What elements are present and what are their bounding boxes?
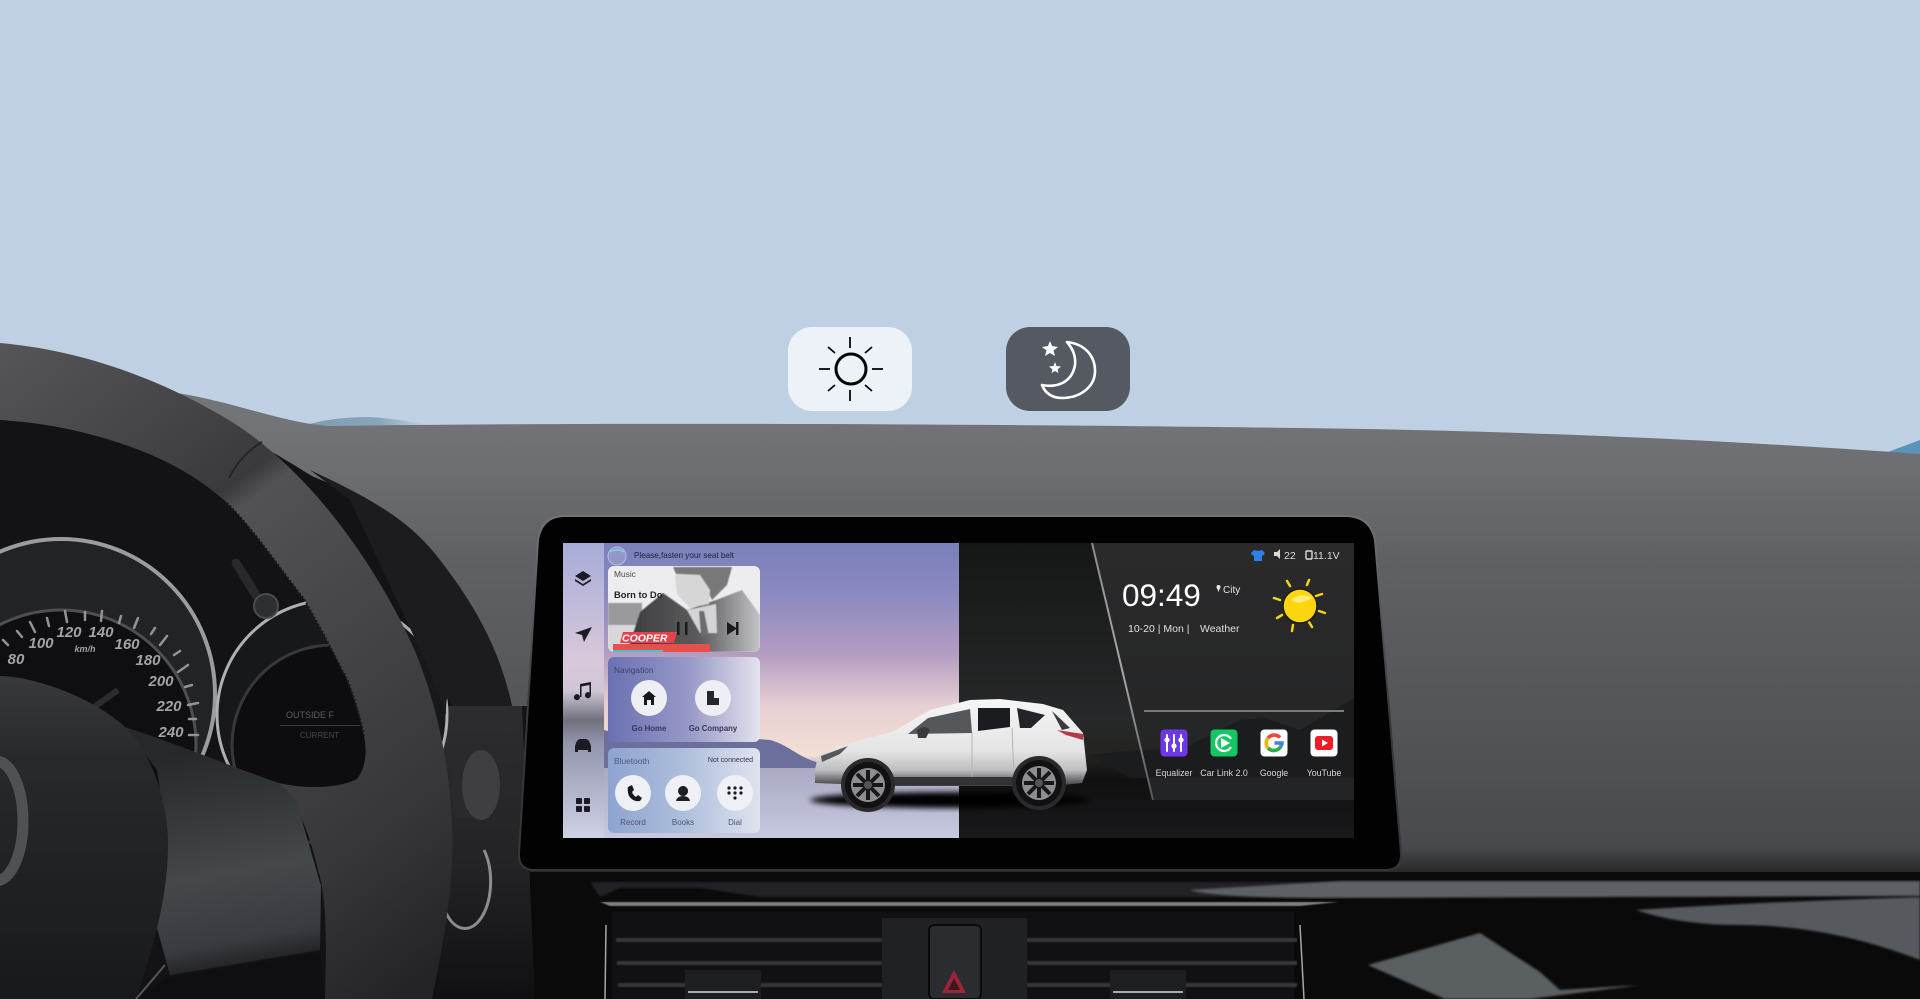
car illustration [810, 699, 1090, 812]
navigation card: Go Company [689, 724, 738, 733]
gloss reflections [1636, 897, 1920, 960]
gauge: secondary dial: OUTSIDE F [286, 710, 335, 720]
panel mountains [1090, 698, 1354, 778]
notification text: Please,fasten your seat belt [634, 551, 735, 560]
day mode button [788, 327, 912, 411]
gauge: speedometer: 160 [114, 636, 140, 653]
hill silhouette [604, 730, 825, 768]
status bar: 11.1V [1313, 550, 1340, 562]
gauge: speedometer: 240 [157, 724, 184, 741]
vent slats [616, 938, 1297, 987]
bluetooth card: Bluetooth [614, 756, 650, 766]
steering wheel rim [0, 343, 452, 999]
gauge: speedometer: 200 [147, 673, 174, 690]
app icons: Equalizer [1156, 768, 1192, 778]
night mode button [1006, 327, 1130, 411]
assistant orb [608, 547, 626, 565]
gauge: secondary dial [217, 600, 447, 845]
head unit bezel [519, 516, 1401, 870]
mirror and door lines [917, 727, 930, 738]
date and weather labels [1128, 623, 1240, 635]
headlight and tail light [821, 746, 848, 762]
steering wheel hub [0, 676, 168, 999]
stalk lever [236, 563, 278, 618]
panel diagonal edge [1092, 543, 1153, 800]
gauge: speedometer: 220 [155, 698, 182, 715]
binnacle hood shadow [310, 470, 512, 715]
screen: dark half [959, 543, 1354, 838]
app icons [1156, 730, 1341, 778]
screen: light half [563, 543, 960, 838]
sidebar [563, 543, 604, 838]
gauge: speedometer: 120 [56, 624, 82, 641]
date and weather labels: 10-20 | Mon | [1128, 623, 1190, 635]
gauge: speedometer: 140 [88, 624, 114, 641]
status bar: 22 [1284, 550, 1296, 562]
lower glossy trim and air vents [530, 872, 1920, 999]
navigation card: Navigation [614, 665, 654, 675]
city: City [1223, 585, 1240, 596]
gauge: speedometer: 100 [28, 635, 54, 652]
rim seam [229, 442, 262, 478]
navigation card: Go Home [632, 724, 667, 733]
scene: car interior with head unit [0, 327, 1920, 999]
sea glimpses on horizon [303, 417, 1920, 456]
navigation card [608, 657, 760, 742]
bluetooth card: Record [620, 818, 646, 827]
bluetooth card: Dial [728, 818, 742, 827]
music card: Music [614, 569, 636, 579]
date and weather labels: Weather [1200, 623, 1240, 635]
music card: Born to Do [614, 589, 663, 600]
music card: COOPER [622, 632, 668, 644]
bluetooth card: Not connected [708, 757, 753, 764]
music card [608, 566, 760, 653]
gauge: speedometer: 80 [8, 651, 25, 668]
gauge: speedometer: 180 [135, 652, 161, 669]
vent tabs [685, 970, 761, 999]
playback controls [677, 622, 738, 635]
weather sun [1274, 580, 1325, 631]
album art figure [608, 567, 760, 652]
dashboard top [0, 392, 1920, 876]
hazard switch [882, 918, 1027, 999]
steering wheel spoke [125, 727, 321, 975]
app icons: Google [1260, 768, 1288, 778]
bluetooth card: Books [672, 818, 694, 827]
info panel [1092, 543, 1354, 800]
gauge: speedometer [0, 539, 215, 880]
rim stitching [225, 501, 364, 736]
wheel stalk knob [452, 750, 500, 820]
app icons: YouTube [1307, 768, 1341, 778]
windows [908, 709, 972, 734]
key ring [446, 850, 491, 928]
console panel right of wheel [420, 706, 535, 999]
gauge: speedometer: km/h [74, 644, 96, 654]
app icons: Car Link 2.0 [1200, 768, 1248, 778]
bluetooth card [608, 748, 760, 833]
instrument cluster recess [0, 420, 530, 999]
album art badge [620, 632, 677, 643]
vent frame highlight [600, 902, 1338, 906]
lower wheel gap [136, 952, 325, 999]
clock: 09:49 [1122, 577, 1201, 613]
divider [1144, 710, 1344, 712]
gauge: secondary dial: CURRENT [300, 731, 339, 740]
sidebar icons [574, 571, 592, 812]
status bar [1251, 549, 1340, 562]
wheels [841, 758, 895, 812]
